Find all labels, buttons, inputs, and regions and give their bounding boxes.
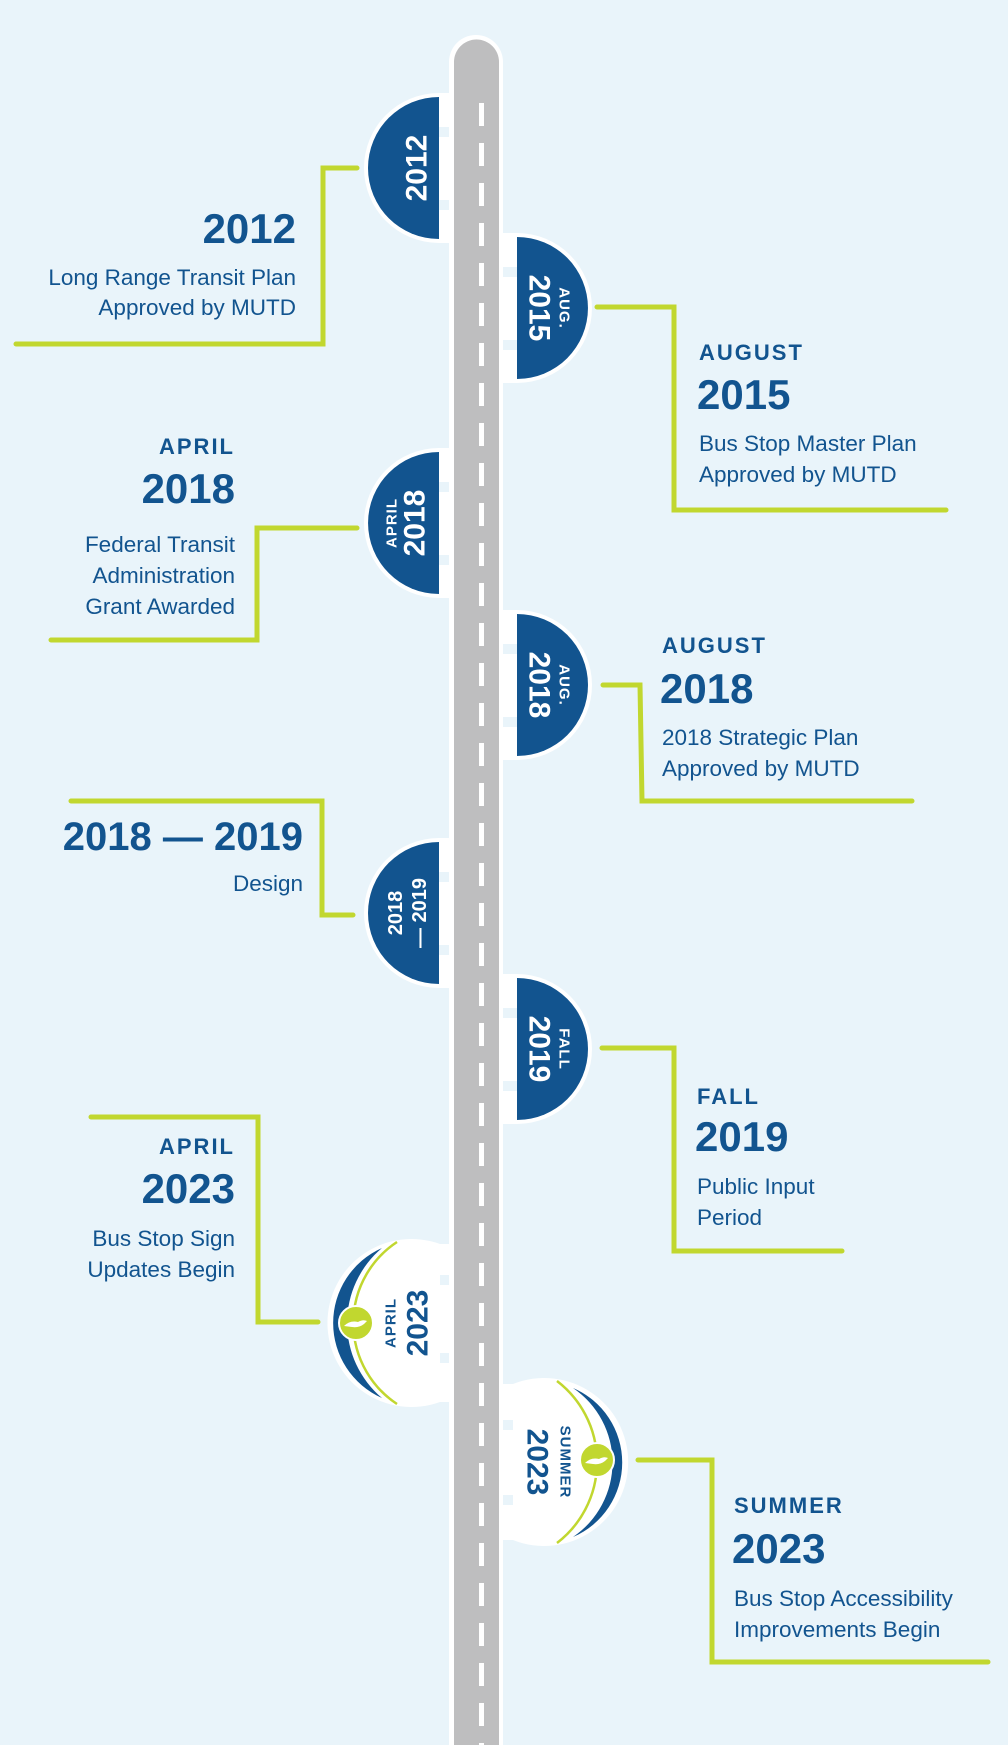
milestone disk: April 2023: APRIL (382, 1298, 400, 1348)
text: Summer 2023 (732, 1493, 954, 1642)
connector April 2023 (91, 1117, 318, 1322)
text: April 2023 (87, 1134, 235, 1282)
text: April 2023: Bus Stop Sign (92, 1226, 235, 1251)
milestone disk: 2018-2019: 2018 (385, 891, 407, 935)
milestone disk: Aug 2015: 2015 (522, 275, 556, 341)
connector Summer 2023 (638, 1460, 988, 1662)
text: Fall 2019 (695, 1084, 815, 1230)
text: Summer 2023: Improvements Begin (734, 1617, 940, 1642)
milestone disk: April 2018: APRIL (384, 498, 400, 548)
text: 2012: Long Range Transit Plan (48, 265, 296, 290)
milestone disk: April 2018: 2018 (398, 490, 432, 556)
text: April 2023: Updates Begin (87, 1257, 235, 1282)
road (449, 35, 503, 1745)
connector Fall 2019 (602, 1048, 842, 1251)
text: Summer 2023: Bus Stop Accessibility (734, 1586, 954, 1611)
milestone disk: 2012: 2012 (400, 135, 434, 201)
text: August 2018: AUGUST (662, 633, 767, 658)
text: Fall 2019: 2019 (695, 1113, 788, 1160)
text: Fall 2019: FALL (697, 1084, 760, 1109)
text: August 2015 (697, 340, 917, 487)
milestone disk: Fall 2019 (503, 974, 592, 1124)
text: April 2023: 2023 (142, 1165, 235, 1212)
text: August 2015: AUGUST (699, 340, 804, 365)
text: 2012: Approved by MUTD (98, 295, 296, 320)
milestone disk: Fall 2019: FALL (556, 1028, 572, 1070)
text: August 2015: Approved by MUTD (699, 462, 897, 487)
text: Summer 2023: 2023 (732, 1525, 825, 1572)
text: April 2018: 2018 (142, 465, 235, 512)
text: 2018-2019 design: 2018 — 2019 (63, 815, 303, 859)
connector 2018-2019 (71, 801, 353, 915)
text: Fall 2019: Period (697, 1205, 762, 1230)
milestone disk: 2012 (364, 93, 449, 243)
text: Summer 2023: SUMMER (734, 1493, 844, 1518)
text: April 2018: Administration (92, 563, 235, 588)
milestone disk: April 2023 (327, 1239, 449, 1407)
milestone disk: Fall 2019: 2019 (522, 1016, 556, 1082)
text: Fall 2019: Public Input (697, 1174, 815, 1199)
milestone disk: Aug 2018: 2018 (522, 652, 556, 718)
text: April 2023: APRIL (159, 1134, 235, 1159)
text: April 2018: Federal Transit (85, 532, 236, 557)
connector 2012 (16, 168, 357, 344)
text: August 2018: 2018 Strategic Plan (662, 725, 858, 750)
milestone disk: Summer 2023: 2023 (520, 1429, 554, 1495)
text: August 2018: 2018 (660, 665, 753, 712)
text: 2018-2019 design (63, 815, 303, 896)
text: April 2018: Grant Awarded (85, 594, 235, 619)
milestone disk: Summer 2023: SUMMER (556, 1426, 574, 1498)
connector Aug 2015 (597, 307, 946, 510)
milestone disk: 2018-2019 (364, 838, 449, 988)
text: August 2018 (660, 633, 860, 781)
milestone disk: Aug 2018 (503, 610, 592, 760)
milestone disk: April 2018 (364, 448, 449, 598)
milestone disk: 2018-2019: — 2019 (409, 878, 431, 948)
text: August 2015: 2015 (697, 371, 790, 418)
connector April 2018 (51, 528, 357, 640)
text: 2012: 2012 (203, 205, 296, 252)
text: April 2018 (85, 434, 236, 619)
milestone disk: Aug 2018: AUG. (556, 664, 572, 706)
text: 2018-2019 design: Design (233, 871, 303, 896)
text: August 2018: Approved by MUTD (662, 756, 860, 781)
text: April 2018: APRIL (159, 434, 235, 459)
text: August 2015: Bus Stop Master Plan (699, 431, 917, 456)
milestone disk: Summer 2023 (503, 1378, 628, 1546)
milestone disk: April 2023: 2023 (402, 1290, 434, 1356)
milestone disk: Aug 2015: AUG. (556, 287, 572, 329)
text: 2012 (48, 205, 296, 320)
connector Aug 2018 (603, 685, 912, 801)
milestone disk: Aug 2015 (503, 233, 592, 383)
